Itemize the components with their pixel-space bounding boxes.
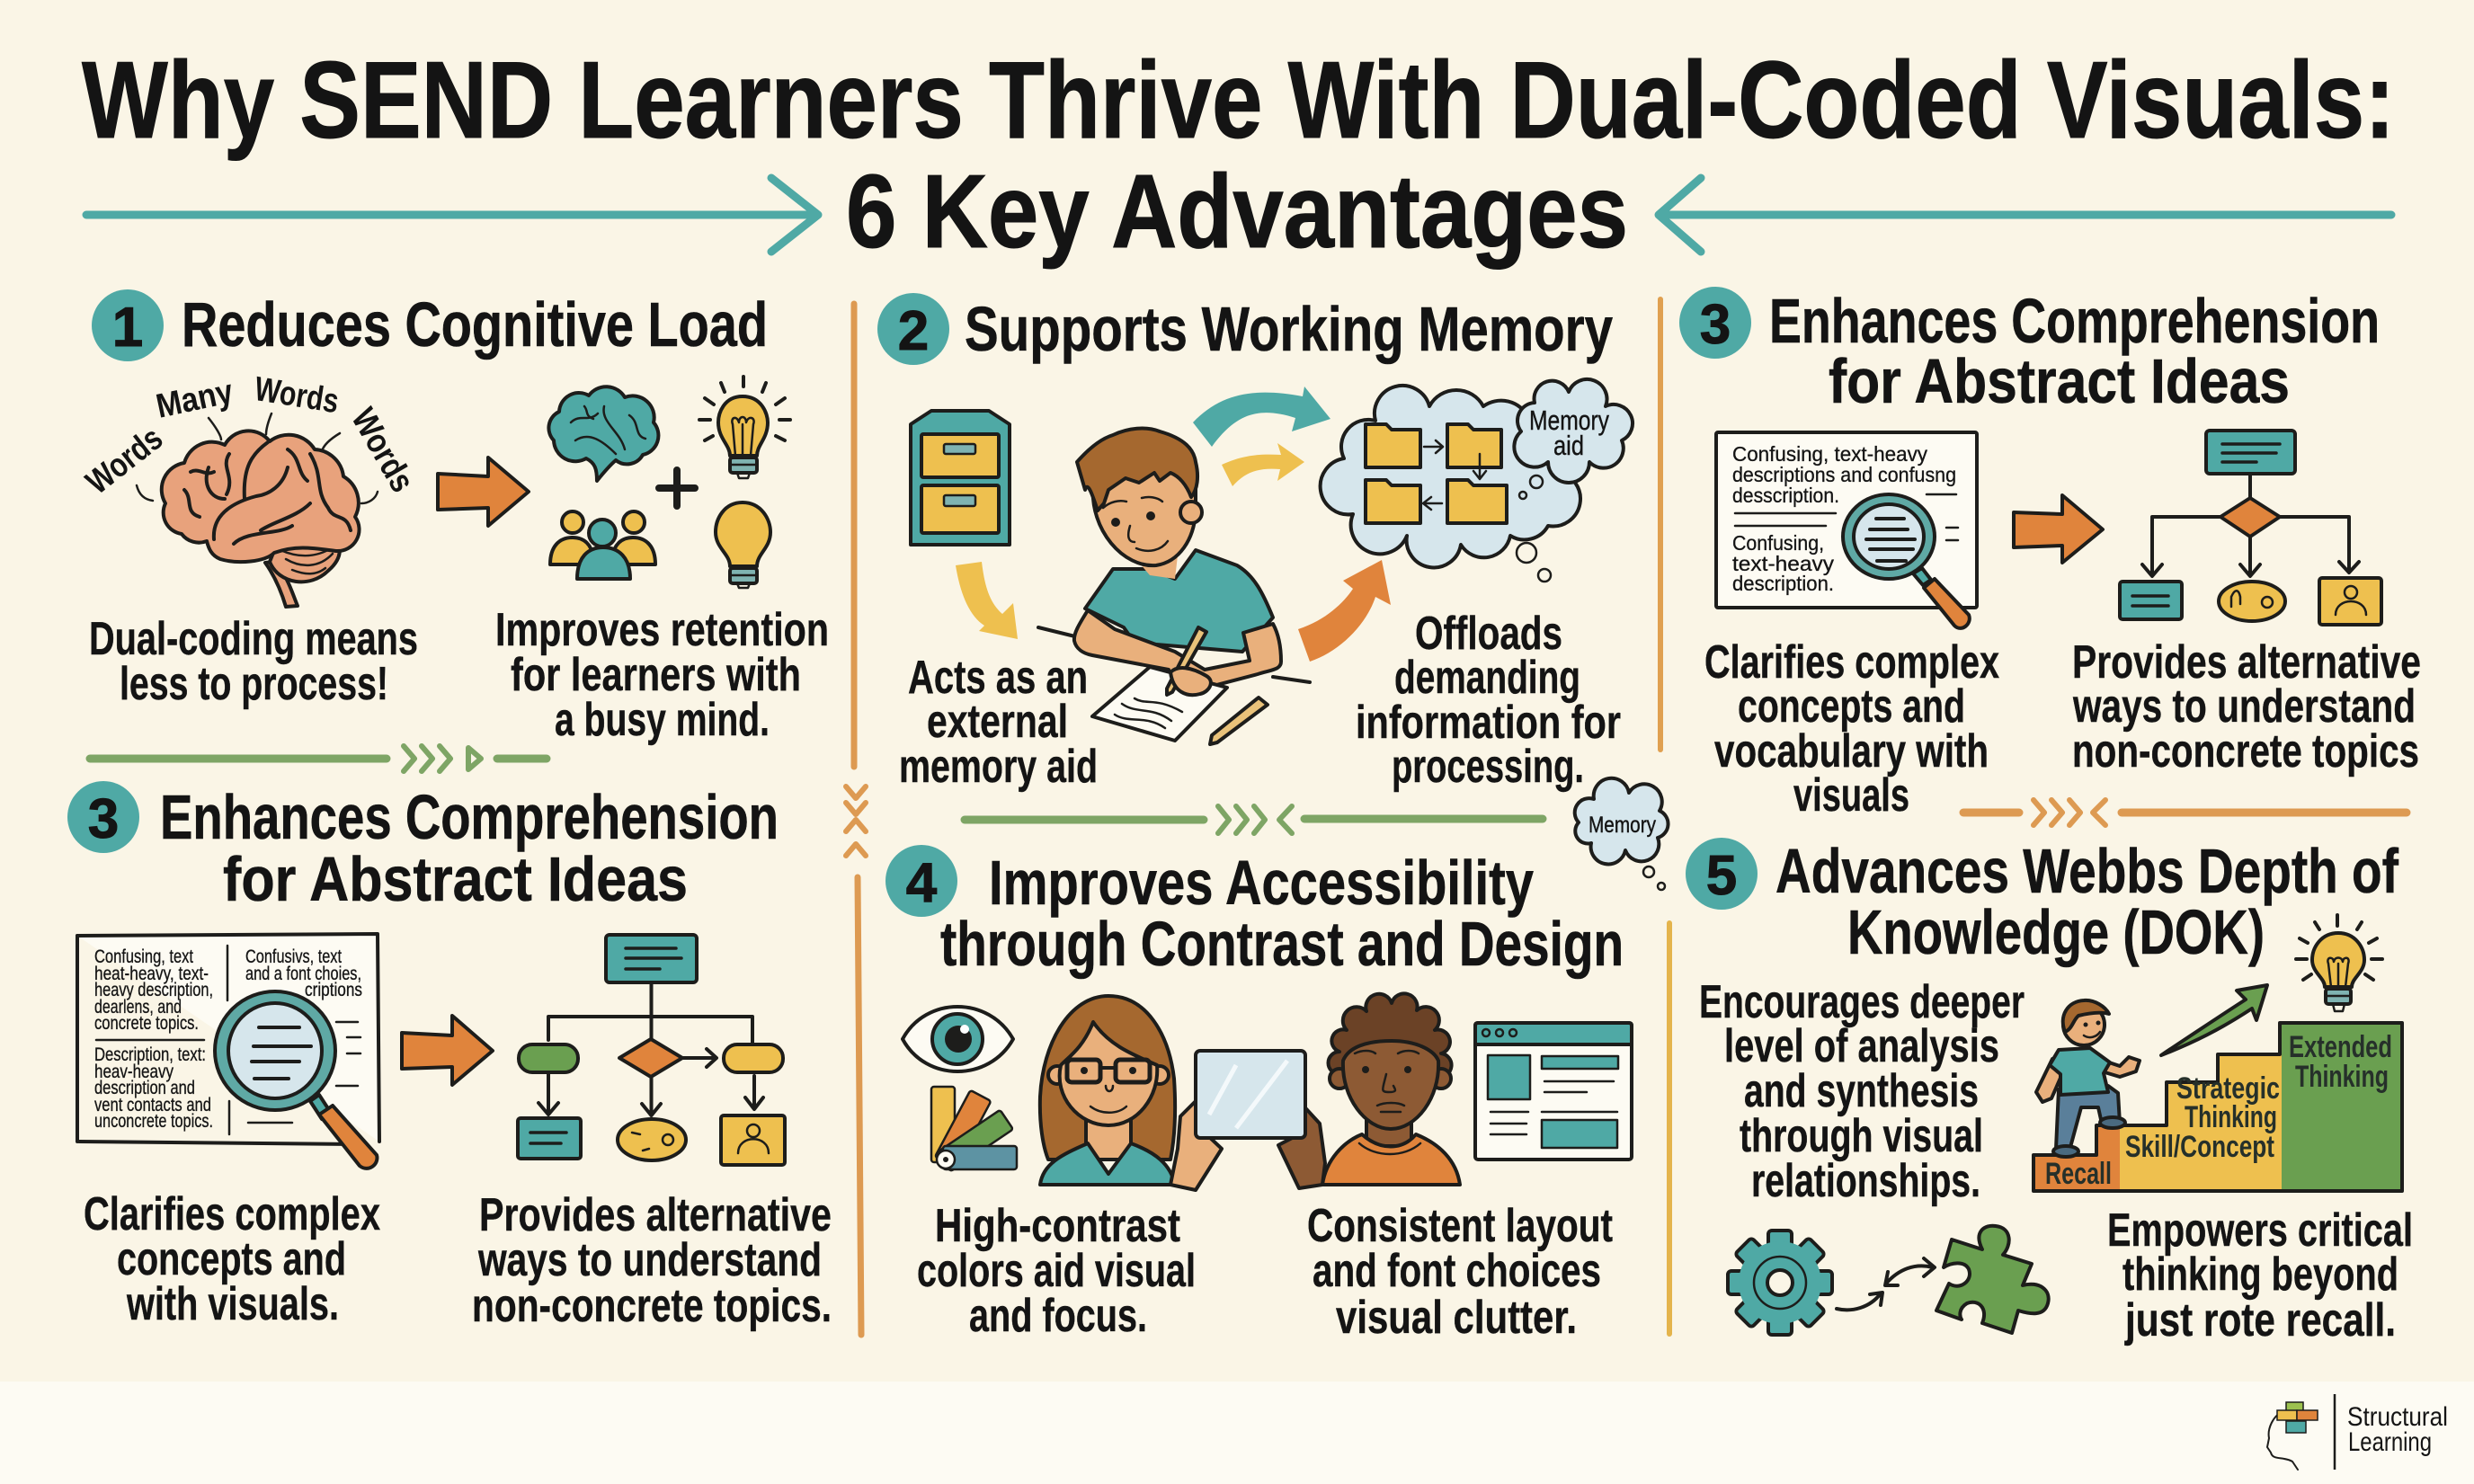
heading 3: Enhances Comprehension bbox=[160, 782, 779, 852]
chart: DOK staircase: Skill/Concept bbox=[2125, 1130, 2274, 1164]
arrow: yellow curved bbox=[1222, 443, 1304, 486]
icon: plain bulb bbox=[716, 502, 770, 588]
text: alternative ways: ways to understand bbox=[477, 1234, 822, 1286]
callout: memory aid cloud: Memory bbox=[1529, 404, 1609, 436]
text: clarifies: with visuals. bbox=[126, 1278, 339, 1330]
heading 3: for Abstract Ideas bbox=[223, 844, 688, 914]
number badge 1 bbox=[92, 289, 164, 361]
callout: memory aid cloud bbox=[1514, 379, 1633, 483]
text: encourages: Encourages deeper bbox=[1699, 976, 2025, 1028]
text: clarifies: concepts and bbox=[117, 1233, 346, 1285]
text: encourages: relationships. bbox=[1751, 1155, 1980, 1207]
text: consistent layout bbox=[1307, 1200, 1613, 1344]
text: consistent layout: visual clutter. bbox=[1336, 1292, 1577, 1344]
text-heavy document: vent contacts and bbox=[94, 1095, 211, 1115]
chart: DOK staircase bbox=[2033, 1023, 2402, 1191]
text: dual-coding: Dual-coding means bbox=[89, 613, 418, 665]
number badge 2: 2 bbox=[898, 300, 929, 362]
text: clarifies bbox=[84, 1188, 380, 1330]
text: consistent layout: and font choices bbox=[1313, 1245, 1601, 1297]
floating words: Words bbox=[252, 370, 342, 421]
heading 1: Reduces Cognitive Load bbox=[182, 289, 768, 360]
arrow: orange 3 right bbox=[2014, 495, 2103, 563]
arrow: orange 1 bbox=[438, 458, 529, 526]
floating words: Words bbox=[79, 420, 170, 502]
text: external aid bbox=[899, 652, 1098, 793]
icon: web page layout bbox=[1475, 1023, 1632, 1160]
text: clarifies right: Clarifies complex bbox=[1704, 636, 1999, 689]
text-heavy document: unconcrete topics. bbox=[94, 1111, 213, 1132]
text: offloads: demanding bbox=[1394, 652, 1580, 704]
number badge 3 bbox=[67, 781, 139, 853]
callout: memory aid cloud: aid bbox=[1553, 430, 1584, 461]
illustration: young man bbox=[1322, 993, 1460, 1185]
heading 3 bbox=[160, 782, 779, 914]
text: dual-coding: less to process! bbox=[120, 658, 388, 710]
text: high contrast: colors aid visual bbox=[917, 1245, 1196, 1297]
panel: 5 advances Webbs DOK bbox=[1686, 836, 2413, 1346]
text: alternative ways bbox=[472, 1189, 832, 1332]
arrow: teal curved bbox=[1193, 387, 1330, 447]
text-heavy document: description and bbox=[94, 1078, 195, 1098]
icon: colour swatch fan bbox=[931, 1087, 1017, 1171]
text: high contrast: and focus. bbox=[969, 1290, 1147, 1342]
text: empowers: thinking beyond bbox=[2122, 1249, 2398, 1301]
icon: magnifying glass bbox=[215, 991, 377, 1169]
icon: gear bbox=[1728, 1231, 1832, 1335]
text-heavy document: Description, text: bbox=[94, 1044, 206, 1065]
text: encourages: level of analysis bbox=[1724, 1020, 1999, 1072]
text: clarifies right bbox=[1704, 636, 1999, 822]
chart: DOK staircase: Recall bbox=[2045, 1157, 2112, 1191]
number badge 5 bbox=[1686, 838, 1758, 910]
panel: 4 improves accessibility bbox=[885, 845, 1632, 1344]
icon: teal brain bbox=[548, 387, 658, 481]
text-heavy document right: Confusing, bbox=[1732, 531, 1824, 555]
icon: glowing bulb bbox=[699, 377, 790, 478]
heading 3 right: for Abstract Ideas bbox=[1829, 346, 2290, 416]
text-heavy document right: description. bbox=[1732, 572, 1834, 595]
text: alternative ways: non-concrete topics. bbox=[472, 1280, 832, 1332]
number badge 3: 3 bbox=[88, 788, 119, 850]
text: external aid: Acts as an bbox=[908, 652, 1088, 704]
text-heavy document right: Confusing, text-heavy bbox=[1732, 442, 1927, 466]
text: alternative ways: Provides alternative bbox=[479, 1189, 832, 1241]
arrow: yellow down bbox=[956, 562, 1018, 639]
logo: Structural Learning bbox=[2267, 1394, 2448, 1470]
icon: puzzle piece bbox=[1936, 1226, 2049, 1333]
text: improves retention bbox=[495, 604, 829, 746]
icon: large brain bbox=[162, 431, 360, 607]
text: high contrast bbox=[917, 1200, 1196, 1342]
text: improves retention: a busy mind. bbox=[555, 694, 770, 746]
callout: small memory cloud bbox=[1575, 778, 1669, 890]
text: clarifies: Clarifies complex bbox=[84, 1188, 380, 1240]
text: alternative ways right bbox=[2072, 636, 2421, 778]
text: offloads: processing. bbox=[1392, 741, 1584, 793]
heading 4: through Contrast and Design bbox=[940, 909, 1624, 979]
text-heavy document: dearlens, and bbox=[94, 997, 182, 1017]
icon: tablet with hands bbox=[1170, 1051, 1325, 1190]
text-heavy document right: desscription. bbox=[1732, 484, 1839, 507]
text: external aid: memory aid bbox=[899, 741, 1098, 793]
text-heavy document: and a font choies, bbox=[245, 964, 361, 984]
arrow: orange curved bbox=[1298, 560, 1391, 662]
arrow: orange 3 bbox=[402, 1016, 493, 1085]
text-heavy document right: descriptions and confusng bbox=[1732, 463, 1956, 486]
text-heavy document: Confusing, text bbox=[94, 946, 193, 967]
text: dual-coding bbox=[89, 613, 418, 710]
logo: Structural Learning: Structural bbox=[2347, 1402, 2448, 1432]
text-heavy document right: text-heavy bbox=[1732, 552, 1835, 575]
plus bbox=[659, 470, 695, 506]
text-heavy document: heav-heavy bbox=[94, 1062, 174, 1082]
heading 4 bbox=[940, 848, 1624, 979]
text: encourages: and synthesis bbox=[1744, 1065, 1979, 1117]
heading 3 right bbox=[1769, 286, 2380, 416]
text: external aid: external bbox=[927, 696, 1068, 748]
number badge 1: 1 bbox=[112, 297, 143, 359]
text-heavy document: concrete topics. bbox=[94, 1013, 199, 1034]
number badge 4 bbox=[885, 845, 957, 917]
panel: 3 enhances comprehension (right) bbox=[1679, 286, 2421, 822]
text-heavy document: heavy description, bbox=[94, 980, 213, 1000]
text: high contrast: High-contrast bbox=[935, 1200, 1180, 1252]
panel: 3 enhances comprehension (left) bbox=[67, 781, 832, 1332]
text: offloads: Offloads bbox=[1415, 608, 1562, 660]
text: improves retention: Improves retention bbox=[495, 604, 829, 656]
heading 5: Knowledge (DOK) bbox=[1847, 897, 2265, 967]
text: clarifies right: concepts and bbox=[1738, 680, 1965, 733]
text-heavy document bbox=[77, 934, 379, 1144]
floating words bbox=[79, 370, 422, 503]
text-heavy document: criptions bbox=[305, 980, 362, 1000]
chart: DOK staircase: Thinking bbox=[2185, 1100, 2277, 1134]
icon: idea bulb bbox=[2296, 915, 2382, 1011]
text: clarifies right: visuals bbox=[1793, 769, 1909, 822]
heading 4: Improves Accessibility bbox=[989, 848, 1534, 918]
logo: Structural Learning: Learning bbox=[2348, 1427, 2432, 1457]
text: clarifies right: vocabulary with bbox=[1714, 725, 1989, 778]
icon: eye bbox=[903, 1007, 1013, 1071]
text: offloads: information for bbox=[1356, 697, 1621, 749]
panel: 1 reduces cognitive load bbox=[79, 289, 829, 746]
number badge 3 right: 3 bbox=[1700, 294, 1731, 356]
illustration: boy climbing bbox=[2036, 1000, 2140, 1157]
number badge 3 right bbox=[1679, 287, 1751, 359]
arrows: connecting gear and puzzle bbox=[1837, 1258, 1935, 1310]
text: empowers: just rote recall. bbox=[2124, 1294, 2396, 1346]
floating words: Many bbox=[153, 373, 236, 426]
text-heavy document right bbox=[1716, 432, 1977, 608]
heading 2: Supports Working Memory bbox=[965, 294, 1613, 364]
number badge 4: 4 bbox=[906, 852, 938, 914]
text-heavy document: Confusivs, text bbox=[245, 946, 342, 967]
flowchart right bbox=[2120, 431, 2381, 625]
text: encourages: through visual bbox=[1740, 1110, 1983, 1162]
illustration: boy writing bbox=[1038, 429, 1310, 744]
panel: 2 supports working memory bbox=[877, 293, 1633, 793]
floating words: Words bbox=[343, 402, 422, 499]
callout: small memory cloud: Memory bbox=[1589, 813, 1656, 838]
text-heavy document: heat-heavy, text- bbox=[94, 964, 209, 984]
icon: magnifying glass right bbox=[1843, 494, 1970, 628]
text: encourages bbox=[1699, 976, 2025, 1207]
arrow: title left bbox=[86, 178, 818, 252]
illustration: woman with glasses bbox=[1040, 996, 1175, 1185]
chart: DOK staircase: Extended bbox=[2289, 1030, 2392, 1064]
number badge 2 bbox=[877, 293, 949, 365]
icon: people bbox=[550, 511, 655, 579]
chart: DOK staircase: Strategic bbox=[2176, 1071, 2280, 1106]
icon: filing cabinet bbox=[911, 411, 1010, 545]
arrow: green up bbox=[2161, 985, 2267, 1055]
arrow: title right bbox=[1659, 178, 2391, 252]
text: empowers bbox=[2107, 1204, 2413, 1346]
icon: thought cloud with folders bbox=[1321, 386, 1580, 582]
text: consistent layout: Consistent layout bbox=[1307, 1200, 1613, 1252]
text: improves retention: for learners with bbox=[511, 649, 801, 701]
title bbox=[82, 39, 2395, 270]
title: 6 Key Advantages bbox=[846, 153, 1628, 270]
chart: DOK staircase: Thinking bbox=[2295, 1060, 2389, 1094]
text: offloads bbox=[1356, 608, 1621, 793]
flowchart bbox=[518, 935, 785, 1165]
number badge 5: 5 bbox=[1706, 845, 1737, 907]
heading 5 bbox=[1775, 836, 2399, 967]
